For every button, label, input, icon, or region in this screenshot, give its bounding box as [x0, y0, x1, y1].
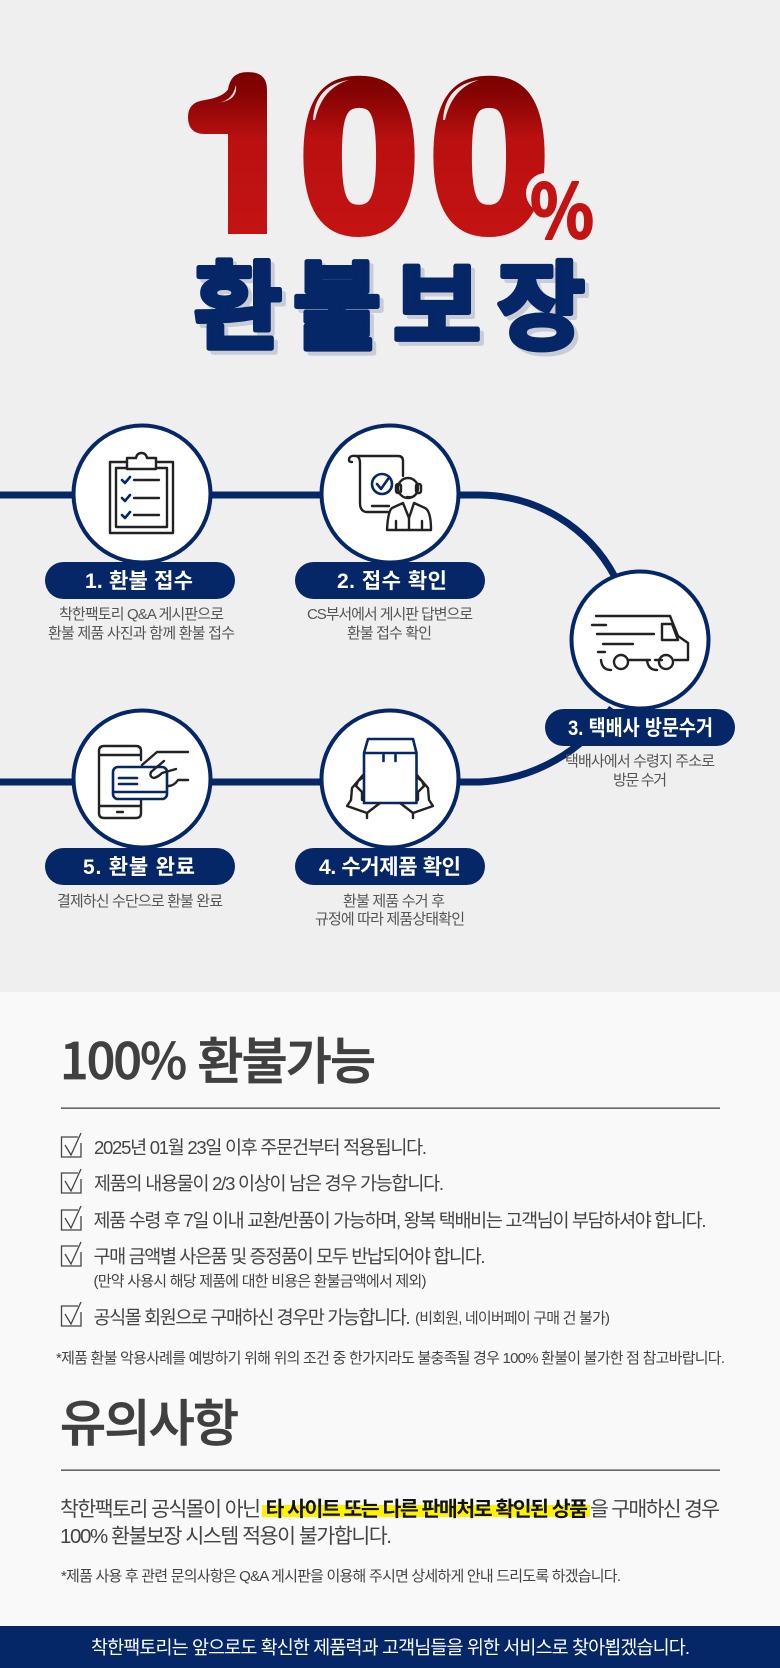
checklist: [62, 1133, 706, 1328]
circle: [322, 710, 458, 848]
item 5: 공식몰 회원으로 구매하신 경우만 가능합니다.: [94, 1307, 410, 1328]
description: 환불 접수 확인: [347, 625, 432, 642]
numerals 00: 0: [429, 35, 549, 276]
percent sign: %: [530, 153, 594, 260]
description: [565, 753, 715, 789]
notice paragraph: 을 구매하신 경우: [590, 1498, 720, 1521]
label pill: [545, 709, 735, 746]
icon: clipboard: [110, 453, 173, 533]
background: bottom section: [0, 992, 780, 1626]
divider: [61, 1108, 720, 1109]
title: 환불보장: 불: [293, 230, 381, 369]
circle: [74, 710, 210, 848]
title: 100%: [188, 72, 593, 240]
label pill: [45, 848, 235, 885]
step 1: [45, 426, 235, 642]
percent cut-out: [526, 173, 566, 213]
notice paragraph: 착한팩토리 공식몰이 아닌: [60, 1498, 261, 1521]
title: 환불보장: 환: [194, 230, 282, 369]
label text: 4. 수거제품 확인: [319, 856, 461, 879]
step 3: [545, 572, 735, 789]
notice paragraph: 타 사이트 또는 다른 판매처로 확인된 상품: [266, 1498, 588, 1521]
circle: [322, 426, 458, 562]
description: 택배사에서 수령지 주소로: [565, 753, 715, 770]
circle: [74, 426, 210, 562]
label pill: [295, 562, 485, 599]
step 2: [295, 426, 485, 642]
heading: 100% 환불가능: 100% 환불가능: [60, 1022, 376, 1094]
item 4: 구매 금액별 사은품 및 증정품이 모두 반납되어야 합니다.: [94, 1246, 486, 1267]
label text: 2. 접수 확인: [337, 570, 447, 593]
background: top section: [0, 0, 780, 992]
item 4: (만약 사용시 해당 제품에 대한 비용은 환불금액에서 제외): [94, 1273, 426, 1290]
label text: 3. 택배사 방문수거: [568, 717, 713, 740]
numeral flag decoration: [188, 76, 236, 134]
numerals 00: [299, 35, 549, 276]
description: 환불 제품 수거 후: [343, 893, 445, 910]
item 2: 제품의 내용물이 2/3 이상이 남은 경우 가능합니다.: [94, 1173, 444, 1194]
divider: [61, 1470, 720, 1471]
numeral 1: 1: [165, 33, 317, 286]
label pill: [45, 562, 235, 599]
numerals 00: 0: [299, 35, 419, 276]
icon: phone and card payment: [99, 746, 188, 818]
footer text: 착한팩토리는 앞으로도 확신한 제품력과 고객님들을 위한 서비스로 찾아뵙겠습니다.: [91, 1637, 690, 1658]
icon: delivery truck: [592, 616, 688, 670]
item 4: [62, 1242, 486, 1290]
description: 방문 수거: [613, 772, 667, 789]
label text: 1. 환불 접수: [85, 570, 193, 593]
notice paragraph: [60, 1498, 720, 1548]
title: 환불보장: [194, 230, 585, 369]
description: 규정에 따라 제품상태확인: [315, 911, 465, 928]
description: 결제하신 수단으로 환불 완료: [57, 893, 223, 910]
description: [307, 606, 473, 642]
process connector lines: [0, 495, 615, 782]
item 5: (비회원, 네이버페이 구매 건 불가): [415, 1310, 610, 1327]
description: 착한팩토리 Q&A 게시판으로: [59, 606, 224, 623]
label text: 5. 환불 완료: [83, 856, 195, 879]
item 1: 2025년 01월 23일 이후 주문건부터 적용됩니다.: [94, 1137, 427, 1158]
description: [48, 606, 235, 642]
item 5: [62, 1302, 610, 1328]
description: [315, 893, 465, 928]
refund note: *제품 환불 악용사례를 예방하기 위해 위의 조건 중 한가지라도 불충족될 경우 100% 환불이 불가한 점 참고바랍니다.: [56, 1350, 725, 1367]
footer bar: [0, 1626, 780, 1668]
description: 환불 제품 사진과 함께 환불 접수: [48, 625, 235, 642]
highlight: [262, 1505, 590, 1517]
heading: 유의사항: 유의사항: [60, 1384, 239, 1456]
description: CS부서에서 게시판 답변으로: [307, 606, 473, 623]
circle: [572, 572, 708, 708]
notice note: *제품 사용 후 관련 문의사항은 Q&A 게시판을 이용해 주시면 상세하게 안내 드리도록 하겠습니다.: [61, 1568, 621, 1585]
glossy highlights: [214, 80, 479, 120]
label pill: [295, 848, 485, 885]
notice paragraph: 100% 환불보장 시스템 적용이 불가합니다.: [60, 1525, 392, 1548]
step 4: [295, 710, 485, 928]
icon: document and agent: [349, 456, 431, 530]
step 5: [45, 710, 235, 910]
icon: hands holding box: [347, 739, 433, 818]
title: 환불보장: 장: [497, 230, 585, 369]
title: 환불보장: 보: [393, 230, 481, 369]
item 3: 제품 수령 후 7일 이내 교환/반품이 가능하며, 왕복 택배비는 고객님이 부담하셔야 합니다.: [94, 1210, 706, 1231]
